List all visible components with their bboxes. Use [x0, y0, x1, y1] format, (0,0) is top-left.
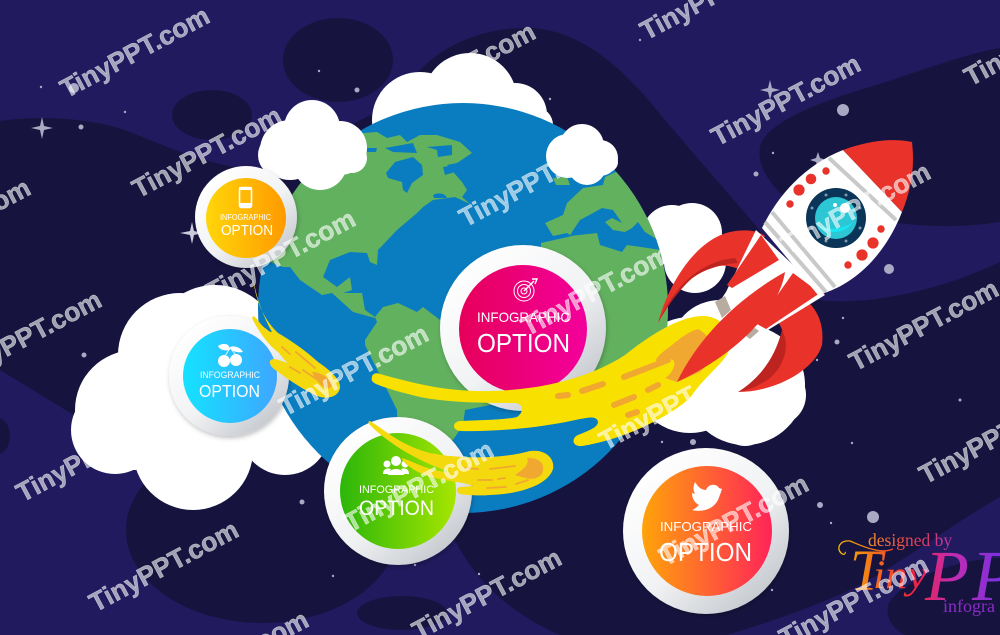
option: blue: INFOGRAPHIC	[200, 370, 260, 381]
rocket: stripes	[765, 158, 896, 292]
flame trail: green option	[368, 421, 553, 495]
option: pink: INFOGRAPHIC	[477, 309, 570, 325]
logo: designed by TinyPPT infographics	[839, 530, 1000, 616]
rocket: tail panel upper	[727, 235, 779, 288]
watermark: TinyPPT.com	[381, 16, 540, 120]
option: blue: OPTION	[199, 381, 260, 401]
lake: Hudson Bay	[386, 157, 423, 193]
logo: designed by TinyPPT infographics: iny	[873, 552, 927, 597]
logo: designed by TinyPPT infographics: T	[850, 538, 886, 603]
rocket: middle fin	[677, 272, 785, 382]
watermark: TinyPPT.com	[339, 434, 498, 538]
watermark: TinyPPT.com	[594, 352, 753, 456]
icon: target	[514, 279, 537, 301]
flame core	[515, 458, 543, 479]
watermark: TinyPPT.com	[55, 0, 214, 104]
watermark: TinyPPT.com	[274, 318, 433, 422]
cloud: big left	[71, 285, 330, 510]
option: yellow: OPTION	[221, 223, 273, 239]
rocket: right fin	[738, 300, 822, 392]
rocket: window	[806, 188, 866, 248]
watermark: TinyPPT.com	[11, 404, 170, 508]
cloud: top behind globe	[372, 53, 553, 168]
cloud: upper left small	[258, 100, 367, 190]
icon: people	[383, 456, 409, 475]
logo: designed by TinyPPT infographics: P	[924, 536, 969, 616]
logo: designed by TinyPPT infographics: designed by	[868, 530, 952, 550]
watermark: TinyPPT.com	[127, 100, 286, 204]
watermark: TinyPPT.com	[706, 48, 865, 152]
rocket	[658, 140, 913, 392]
rocket: left fin	[658, 230, 765, 323]
option: green: OPTION	[359, 497, 434, 520]
rocket: tail panel lower	[757, 273, 820, 329]
watermark: TinyPPT.com	[844, 273, 1000, 377]
watermark: TinyPPT.com	[454, 129, 613, 233]
continent: South America	[365, 303, 491, 441]
icon: phone	[239, 187, 252, 208]
globe	[258, 103, 668, 513]
rocket: nose	[843, 140, 913, 212]
icon: cherries	[218, 344, 243, 367]
option: pink: OPTION	[477, 328, 570, 358]
watermark: TinyPPT.com	[654, 468, 813, 572]
watermark: TinyPPT.com	[776, 156, 935, 260]
flame trail: main rocket exhaust	[372, 316, 730, 446]
option: yellow: INFOGRAPHIC	[220, 213, 271, 222]
flame core	[312, 372, 332, 388]
cloud: right behind rocket	[632, 203, 806, 446]
option: orange: OPTION	[659, 537, 752, 567]
rocket: body	[762, 150, 902, 295]
rocket: nozzle	[715, 296, 759, 339]
watermark: TinyPPT.com	[516, 238, 675, 342]
sea: Mediterranean	[570, 208, 661, 252]
cloud: small on globe right	[546, 124, 618, 185]
watermark: TinyPPT.com	[84, 514, 243, 618]
continent: North America	[270, 132, 472, 318]
rocket: tail white	[722, 230, 825, 331]
option: orange: INFOGRAPHIC	[660, 519, 752, 534]
option: orange	[623, 448, 789, 614]
icon: bird	[692, 482, 722, 511]
flame trail: blue option	[252, 277, 340, 398]
flame core	[656, 329, 712, 382]
option: green: INFOGRAPHIC	[359, 484, 434, 496]
option: blue	[169, 316, 289, 436]
option: yellow	[195, 166, 297, 268]
logo: designed by TinyPPT infographics: infogra	[943, 596, 995, 616]
continent: Europe and Africa	[540, 172, 668, 372]
option: pink	[440, 245, 606, 411]
watermark: TinyPPT.com	[201, 203, 360, 307]
option: green	[324, 417, 472, 565]
rocket: red dots	[786, 167, 885, 269]
